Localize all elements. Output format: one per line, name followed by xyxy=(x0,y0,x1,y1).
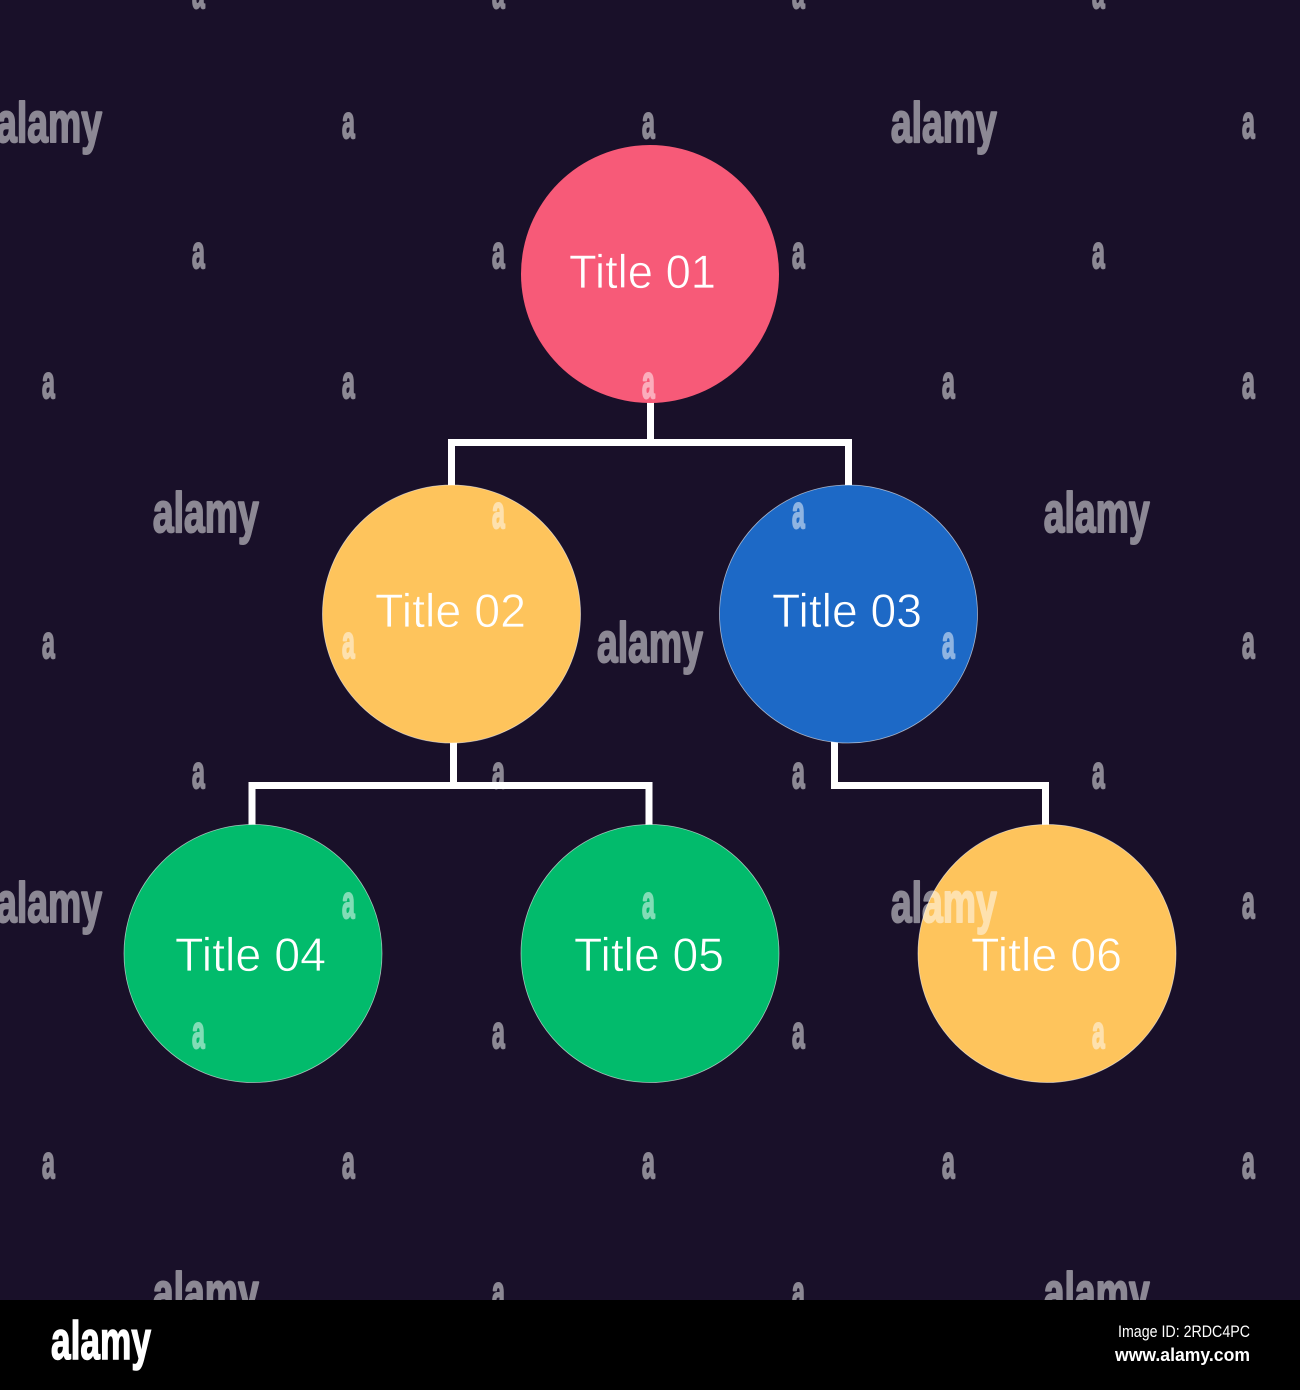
watermark overlay: aaaa xyxy=(192,226,1105,278)
node: title 04: Title 04 xyxy=(175,928,326,981)
watermark overlay: alamy xyxy=(891,871,997,935)
watermark overlay: alamy xyxy=(1044,1261,1150,1325)
watermark overlay: aaa xyxy=(342,96,1255,148)
watermark overlay: aaa xyxy=(342,876,1255,928)
watermark overlay: alamy xyxy=(153,1261,259,1325)
node: title 03 xyxy=(720,485,978,743)
node: title 03: Title 03 xyxy=(772,584,922,637)
watermark overlay: aa xyxy=(492,486,805,538)
node: title 04 xyxy=(124,824,382,1082)
footer bar: Image ID: 2RDC4PC xyxy=(1118,1322,1250,1341)
watermark overlay: aaaa xyxy=(192,1006,1105,1058)
footer bar: www.alamy.com xyxy=(1114,1345,1250,1365)
watermark overlay: aaaaa xyxy=(42,356,1255,408)
connectors: title 01 to titles 02 and 03 xyxy=(452,400,848,489)
node: title 01 xyxy=(521,145,779,403)
footer bar: alamy xyxy=(51,1311,151,1371)
connectors: title 02 to titles 04 and 05 xyxy=(252,740,649,828)
watermark overlay: aaaa xyxy=(42,616,1255,668)
watermark overlay: aa xyxy=(492,1266,805,1318)
node: title 05 xyxy=(521,824,779,1082)
node: title 05: Title 05 xyxy=(574,928,724,981)
watermark overlay: aaaa xyxy=(192,746,1105,798)
node: title 02 xyxy=(322,485,580,743)
watermark overlay: alamy xyxy=(597,611,703,675)
node: title 06 xyxy=(918,824,1176,1082)
node: title 01: Title 01 xyxy=(569,245,716,298)
footer bar xyxy=(0,1300,1300,1390)
node: title 02: Title 02 xyxy=(375,584,526,637)
watermark overlay: alamy xyxy=(891,91,997,155)
watermark overlay: alamy xyxy=(1044,481,1150,545)
watermark overlay: alamy xyxy=(153,481,259,545)
connector: title 03 to title 06 xyxy=(834,740,1046,828)
node: title 06: Title 06 xyxy=(971,928,1122,981)
watermark overlay: aaaaa xyxy=(42,1136,1255,1188)
